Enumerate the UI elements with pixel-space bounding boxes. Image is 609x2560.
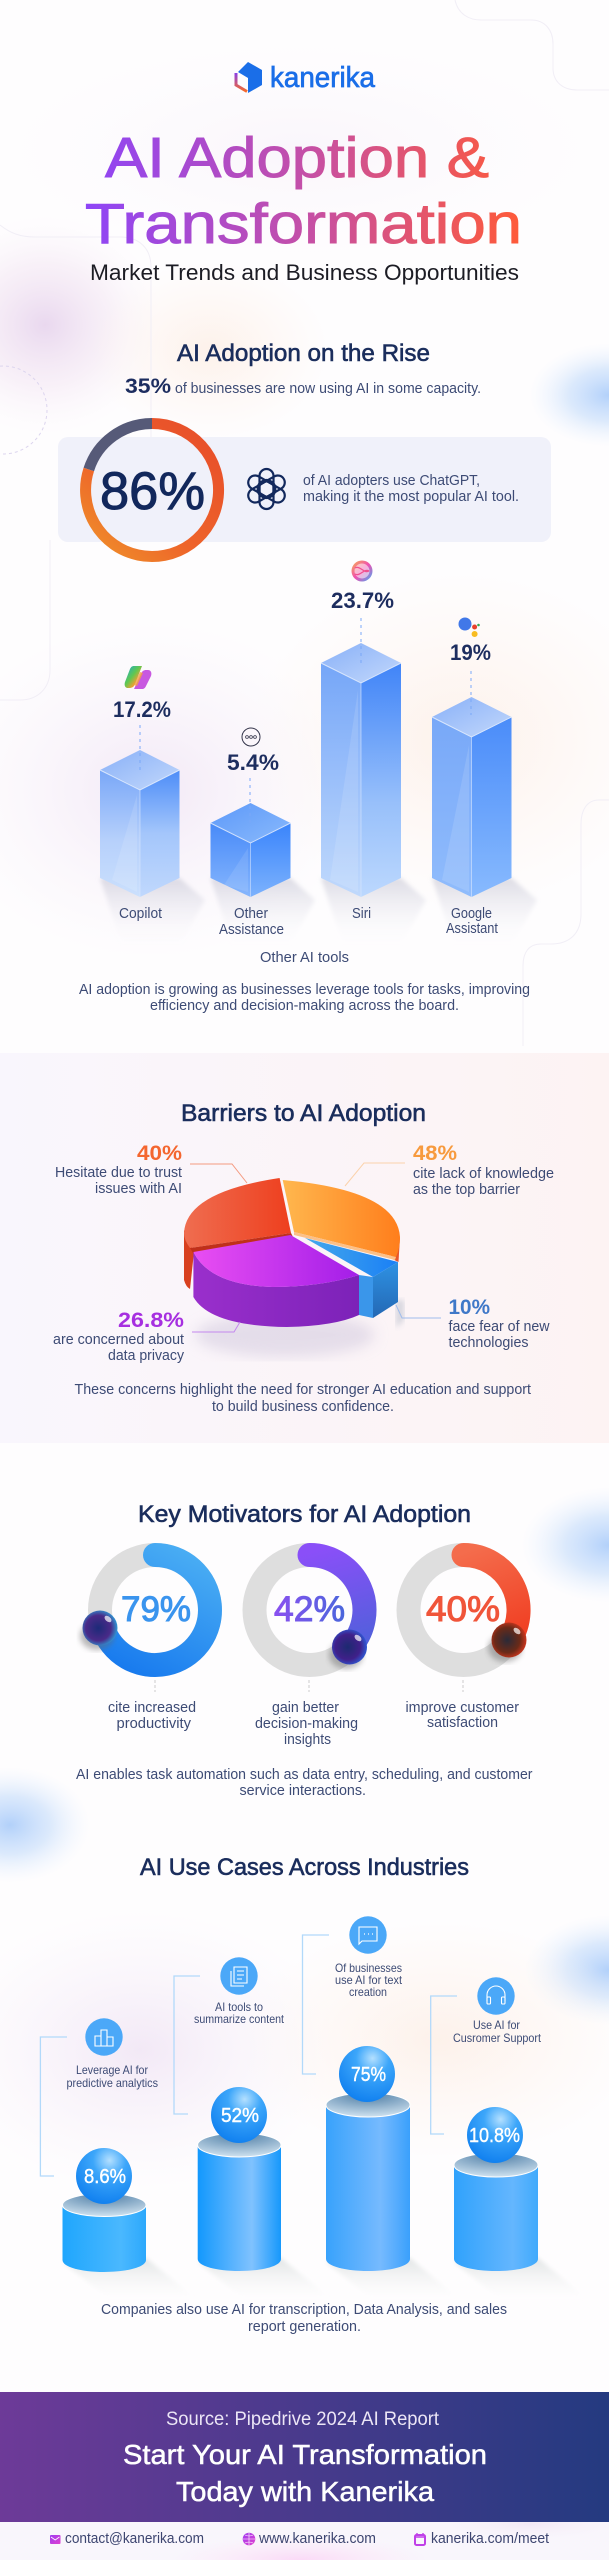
contact: email bbox=[50, 2532, 204, 2545]
heading: barriers: Barriers to AI Adoption bbox=[181, 1100, 426, 1127]
label: productivity bbox=[108, 1700, 196, 1732]
label: text creation: use AI for text bbox=[335, 1973, 403, 1987]
contact: meeting: kanerika.com/meet bbox=[431, 2530, 550, 2547]
label: insights: gain better bbox=[272, 1700, 339, 1716]
callout: 48% lack of knowledge: cite lack of knowledge bbox=[413, 1166, 554, 1182]
label: customer support bbox=[453, 2018, 542, 2045]
label: text creation: Of businesses bbox=[335, 1961, 402, 1975]
label: predictive analytics bbox=[66, 2063, 158, 2090]
callout: 40% trust issues bbox=[55, 1142, 182, 1197]
cylinder: 10.8% bbox=[454, 2107, 538, 2271]
stat: 86%: 86% bbox=[100, 462, 205, 521]
callout: 40% trust issues: issues with AI bbox=[95, 1181, 182, 1197]
text: barriers summary: to build business confidence. bbox=[212, 1399, 394, 1415]
label: productivity: cite increased bbox=[108, 1700, 196, 1716]
text: use cases summary: report generation. bbox=[248, 2319, 361, 2335]
label: insights: insights bbox=[284, 1732, 331, 1748]
bar: Siri bbox=[321, 643, 401, 897]
cylinder: 52%: 52% bbox=[221, 2105, 259, 2127]
icon: other assistance bbox=[242, 728, 260, 746]
text: ChatGPT description: of AI adopters use ChatGPT, bbox=[303, 473, 480, 489]
label: insights bbox=[255, 1700, 358, 1748]
axis label: Other AI tools: Other AI tools bbox=[260, 950, 349, 966]
value: 5.4%: 5.4% bbox=[227, 750, 279, 775]
label: customer support: Cusromer Support bbox=[453, 2031, 542, 2045]
value: 17.2%: 17.2% bbox=[113, 697, 171, 722]
label: text creation bbox=[335, 1961, 403, 1999]
label: satisfaction: improve customer bbox=[406, 1700, 519, 1716]
cylinder: 10.8%: 10.8% bbox=[469, 2125, 520, 2147]
donut: 40% customer satisfaction bbox=[406, 1555, 526, 1731]
callout: 48% lack of knowledge: 48% bbox=[413, 1142, 457, 1165]
callout: 26.8% data privacy: 26.8% bbox=[118, 1309, 184, 1332]
contact: website: www.kanerika.com bbox=[258, 2530, 376, 2547]
text: barriers summary: These concerns highlight the need for stronger AI education and support bbox=[74, 1382, 531, 1398]
icon: ChatGPT knot bbox=[246, 469, 287, 509]
stat: 35% of businesses: 35% bbox=[125, 375, 171, 398]
CTA headline bbox=[123, 2439, 487, 2507]
label: summarize content bbox=[194, 2000, 285, 2026]
cylinder: 52% bbox=[198, 2087, 281, 2271]
callout: 10% fear of new technologies: technologies bbox=[448, 1335, 528, 1351]
callout: 26.8% data privacy bbox=[53, 1309, 185, 1364]
text: motivators summary bbox=[76, 1767, 533, 1799]
label: Other Assistance bbox=[219, 906, 284, 938]
CTA headline: Today with Kanerika bbox=[176, 2476, 434, 2507]
footer: call to action bbox=[0, 2392, 609, 2522]
cylinder: 75%: 75% bbox=[351, 2064, 386, 2086]
callout: 10% fear of new technologies: 10% bbox=[448, 1296, 490, 1319]
callout: 26.8% data privacy: are concerned about bbox=[53, 1332, 184, 1348]
label: Copilot: Copilot bbox=[119, 906, 162, 922]
title: Transformation bbox=[85, 192, 522, 256]
panel: barriers to AI adoption bbox=[0, 1053, 609, 1443]
cylinder: 8.6%: 8.6% bbox=[84, 2166, 126, 2188]
text: barriers summary bbox=[74, 1382, 531, 1415]
label: insights: decision-making bbox=[255, 1716, 358, 1732]
value: 19%: 19% bbox=[450, 640, 491, 665]
icon: chat bubble bbox=[349, 1916, 387, 1954]
bar: Other Assistance bbox=[210, 803, 290, 897]
text: use cases summary bbox=[101, 2302, 507, 2335]
label: summarize content: AI tools to bbox=[215, 2000, 263, 2014]
label: Siri: Siri bbox=[352, 906, 371, 922]
callout: 10% fear of new technologies bbox=[448, 1296, 550, 1351]
donut ring: 86% bbox=[86, 423, 219, 556]
donut: 79% increased productivity bbox=[80, 1555, 210, 1732]
text: ChatGPT description bbox=[303, 473, 519, 505]
heading: AI adoption on the rise: AI Adoption on the Rise bbox=[177, 340, 430, 367]
bar: Copilot bbox=[100, 750, 180, 897]
heading: use cases: AI Use Cases Across Industries bbox=[140, 1854, 469, 1881]
label: Other Assistance: Other bbox=[234, 906, 268, 922]
title: AI Adoption & bbox=[105, 126, 489, 190]
label: Other Assistance: Assistance bbox=[219, 922, 284, 938]
pie chart: barriers bbox=[184, 1178, 404, 1357]
source: Source: Pipedrive 2024 AI Report bbox=[166, 2408, 440, 2430]
donut: 42% better insights bbox=[254, 1555, 367, 1748]
subtitle: Market Trends and Business Opportunities bbox=[90, 260, 519, 285]
contact: email: contact@kanerika.com bbox=[65, 2530, 204, 2547]
label: Google Assistant: Google bbox=[451, 906, 492, 922]
callout: 48% lack of knowledge: as the top barrier bbox=[413, 1182, 520, 1198]
icon: Copilot bbox=[125, 666, 151, 689]
callout: 40% trust issues: 40% bbox=[137, 1142, 182, 1165]
stat: 35% of businesses: of businesses are now using AI in some capacity. bbox=[175, 381, 481, 397]
title bbox=[85, 126, 522, 256]
donut: 79% increased productivity: 79% bbox=[121, 1590, 191, 1629]
contact: meeting bbox=[414, 2532, 549, 2546]
callout: 48% lack of knowledge bbox=[413, 1142, 554, 1198]
callout: 26.8% data privacy: data privacy bbox=[108, 1348, 185, 1364]
text: motivators summary: AI enables task automation such as data entry, scheduling, and customer bbox=[76, 1767, 533, 1783]
text: adoption summary bbox=[79, 982, 530, 1014]
label: satisfaction bbox=[406, 1700, 519, 1731]
icon: Siri bbox=[352, 560, 372, 582]
text: adoption summary: AI adoption is growing as businesses leverage tools for tasks, improving bbox=[79, 982, 530, 998]
cylinder: 75% bbox=[326, 2046, 410, 2271]
bar: Google Assistant bbox=[432, 697, 512, 897]
stat: 35% of businesses bbox=[125, 375, 481, 398]
logo: kanerika: kanerika bbox=[270, 62, 376, 94]
donut: 40% customer satisfaction: 40% bbox=[426, 1590, 500, 1629]
icon: Google Assistant bbox=[458, 618, 480, 637]
contact: website bbox=[242, 2532, 375, 2546]
leader lines bbox=[190, 1163, 441, 1332]
text: adoption summary: efficiency and decision-making across the board. bbox=[150, 998, 459, 1014]
icon: document bbox=[220, 1957, 258, 1995]
label: summarize content: summarize content bbox=[194, 2012, 285, 2026]
text: use cases summary: Companies also use AI for transcription, Data Analysis, and sales bbox=[101, 2302, 507, 2318]
label: text creation: creation bbox=[349, 1985, 387, 1999]
label: Google Assistant bbox=[446, 906, 498, 937]
icon: headset bbox=[477, 1977, 515, 2015]
bar chart: other AI tools bbox=[100, 560, 537, 966]
text: motivators summary: service interactions. bbox=[240, 1783, 366, 1799]
panel: ChatGPT stat bbox=[58, 423, 551, 556]
donut: 42% better insights: 42% bbox=[274, 1590, 345, 1629]
label: satisfaction: satisfaction bbox=[427, 1715, 498, 1731]
contact bar bbox=[50, 2522, 602, 2560]
cylinder: 8.6% bbox=[62, 2148, 146, 2272]
callout: 40% trust issues: Hesitate due to trust bbox=[55, 1165, 182, 1181]
callout: 10% fear of new technologies: face fear of new bbox=[448, 1319, 550, 1335]
label: predictive analytics: Leverage AI for bbox=[76, 2063, 148, 2077]
icon: bar chart bbox=[85, 2018, 123, 2056]
heading: key motivators: Key Motivators for AI Adoption bbox=[138, 1501, 471, 1528]
value: 23.7%: 23.7% bbox=[331, 588, 394, 613]
label: customer support: Use AI for bbox=[473, 2018, 520, 2032]
label: Google Assistant: Assistant bbox=[446, 921, 498, 937]
chart: use cases cylinders bbox=[40, 1916, 586, 2298]
CTA headline: Start Your AI Transformation bbox=[123, 2439, 487, 2470]
label: productivity: productivity bbox=[116, 1716, 192, 1732]
label: predictive analytics: predictive analytics bbox=[66, 2076, 158, 2090]
text: ChatGPT description: making it the most popular AI tool. bbox=[303, 489, 519, 505]
